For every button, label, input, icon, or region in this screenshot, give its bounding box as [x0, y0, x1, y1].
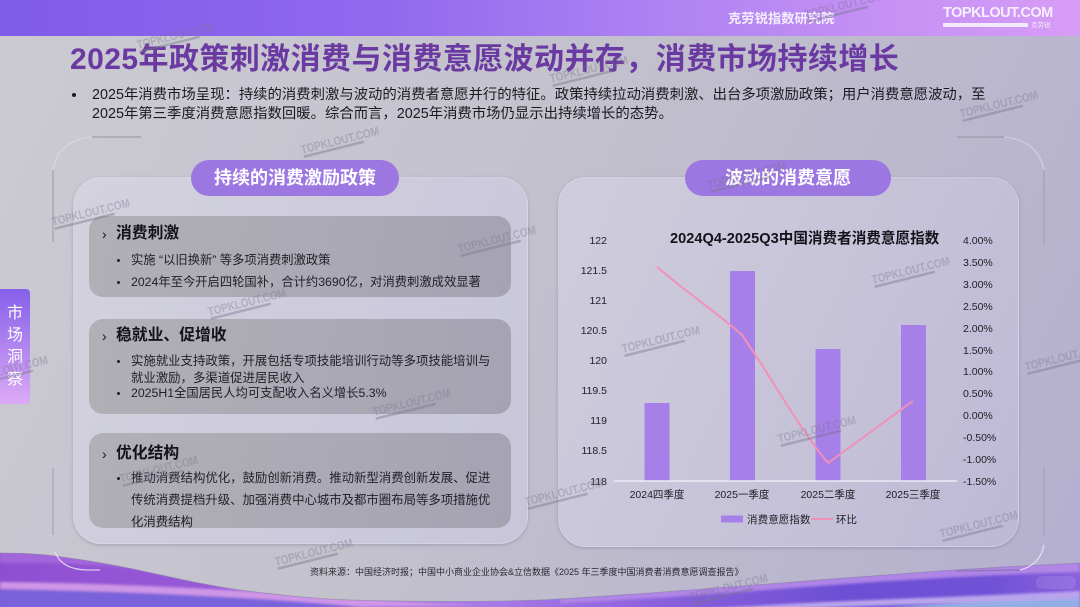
left axis labels: 119.5: [582, 385, 607, 397]
right axis labels: 1.00%: [963, 366, 993, 378]
summary bullet paragraph: 2025年第三季度消费意愿指数回暖。综合而言，2025年消费市场仍显示出持续增长的态势。: [92, 106, 673, 122]
page title: 2025年政策刺激消费与消费意愿波动并存，消费市场持续增长: [70, 43, 899, 76]
right axis labels: [963, 235, 996, 488]
header logo: [943, 5, 1053, 29]
right panel pill heading: [685, 160, 891, 196]
card: optimise structure: 传统消费提档升级、加强消费中心城市及都市圈布局等多项措施优: [131, 493, 490, 507]
summary bullet paragraph: [72, 86, 986, 122]
chart legend: 消费意愿指数: [747, 513, 811, 526]
card: employment and income: [89, 319, 511, 414]
card: employment and income: 2025H1全国居民人均可支配收入名义增长5.3%: [131, 386, 387, 400]
right axis labels: 1.50%: [963, 345, 993, 357]
left axis labels: [581, 235, 607, 488]
source note: 资料来源：中国经济时报；中国中小商业企业协会&立信数据《2025 年三季度中国消费者消费意愿调查报告》: [310, 567, 744, 577]
card: employment and income: 就业激励，多渠道促进居民收入: [131, 371, 304, 385]
category labels: 2024四季度: [630, 488, 685, 501]
side tab: 市场洞察: 场: [7, 327, 23, 344]
card: optimise structure: ›: [102, 446, 107, 462]
left axis labels: 121.5: [581, 265, 607, 277]
category labels: 2025一季度: [715, 488, 770, 501]
card: optimise structure: 优化结构: [116, 445, 179, 462]
left axis labels: 118: [590, 476, 607, 488]
left axis labels: 121: [589, 295, 607, 307]
left axis labels: 118.5: [582, 445, 607, 457]
card: employment and income: 稳就业、促增收: [116, 327, 227, 344]
card: optimise structure: 化消费结构: [131, 515, 193, 529]
side tab: 市场洞察: 察: [7, 371, 23, 388]
right axis labels: 0.50%: [963, 388, 993, 400]
left axis labels: 119: [590, 415, 607, 427]
right axis labels: 2.50%: [963, 301, 993, 313]
card: consumption stimulus: 消费刺激: [116, 225, 179, 242]
side tab: 市场洞察: 市: [7, 305, 23, 322]
right axis labels: -1.00%: [963, 454, 996, 466]
right axis labels: 0.00%: [963, 410, 993, 422]
panel: fluctuating consumption willingness: [556, 160, 1020, 550]
left axis labels: 120.5: [581, 325, 607, 337]
panel: consumption incentive policies: [72, 160, 530, 546]
side tab: 市场洞察: [0, 289, 30, 404]
summary bullet paragraph: 2025年消费市场呈现：持续的消费刺激与波动的消费者意愿并行的特征。政策持续拉动消费刺激、出台多项激励政策；用户消费意愿波动，至: [92, 87, 986, 103]
header bar: [0, 0, 1080, 36]
chart title: 2024Q4-2025Q3中国消费者消费意愿指数: [670, 229, 940, 247]
card: optimise structure: [89, 433, 511, 529]
line: quarter-on-quarter change: [657, 267, 913, 463]
right panel background: [558, 177, 1019, 547]
right axis labels: -1.50%: [963, 476, 996, 488]
right panel pill heading: 波动的消费意愿: [725, 168, 851, 188]
card: optimise structure: 推动消费结构优化，鼓励创新消费。推动新型消费创新发展、促进: [131, 471, 490, 485]
bars: index values: [644, 271, 926, 481]
card: consumption stimulus: 2024年至今开启四轮国补，合计约3690亿，对消费刺激成效显著: [131, 275, 481, 289]
header organisation name: 克劳锐指数研究院: [728, 11, 834, 26]
card: consumption stimulus: ›: [102, 226, 107, 242]
x axis baseline: [614, 480, 957, 482]
header logo: 克劳锐: [1031, 22, 1050, 29]
right axis labels: 3.50%: [963, 257, 993, 269]
right axis labels: 4.00%: [963, 235, 993, 247]
left axis labels: 120: [589, 355, 607, 367]
header logo: TOPKLOUT.COM: [943, 5, 1053, 21]
card: employment and income: ›: [102, 328, 107, 344]
card: employment and income: 实施就业支持政策，开展包括专项技能培训行动等多项技能培训与: [131, 354, 490, 368]
bottom wave decoration: [0, 552, 1080, 607]
left panel background: [73, 177, 528, 544]
category labels: [630, 488, 941, 501]
card: consumption stimulus: [89, 216, 511, 297]
side tab: 市场洞察: 洞: [7, 349, 23, 366]
right axis labels: -0.50%: [963, 432, 996, 444]
right axis labels: 2.00%: [963, 323, 993, 335]
chart legend: 环比: [836, 513, 857, 526]
right axis labels: 3.00%: [963, 279, 993, 291]
category labels: 2025二季度: [801, 488, 856, 501]
chart legend: [721, 513, 857, 526]
left panel pill heading: 持续的消费激励政策: [214, 168, 376, 188]
card: consumption stimulus: 实施 “以旧换新” 等多项消费刺激政策: [131, 253, 330, 267]
left panel pill heading: [191, 160, 399, 196]
left axis labels: 122: [589, 235, 607, 247]
category labels: 2025三季度: [886, 488, 941, 501]
